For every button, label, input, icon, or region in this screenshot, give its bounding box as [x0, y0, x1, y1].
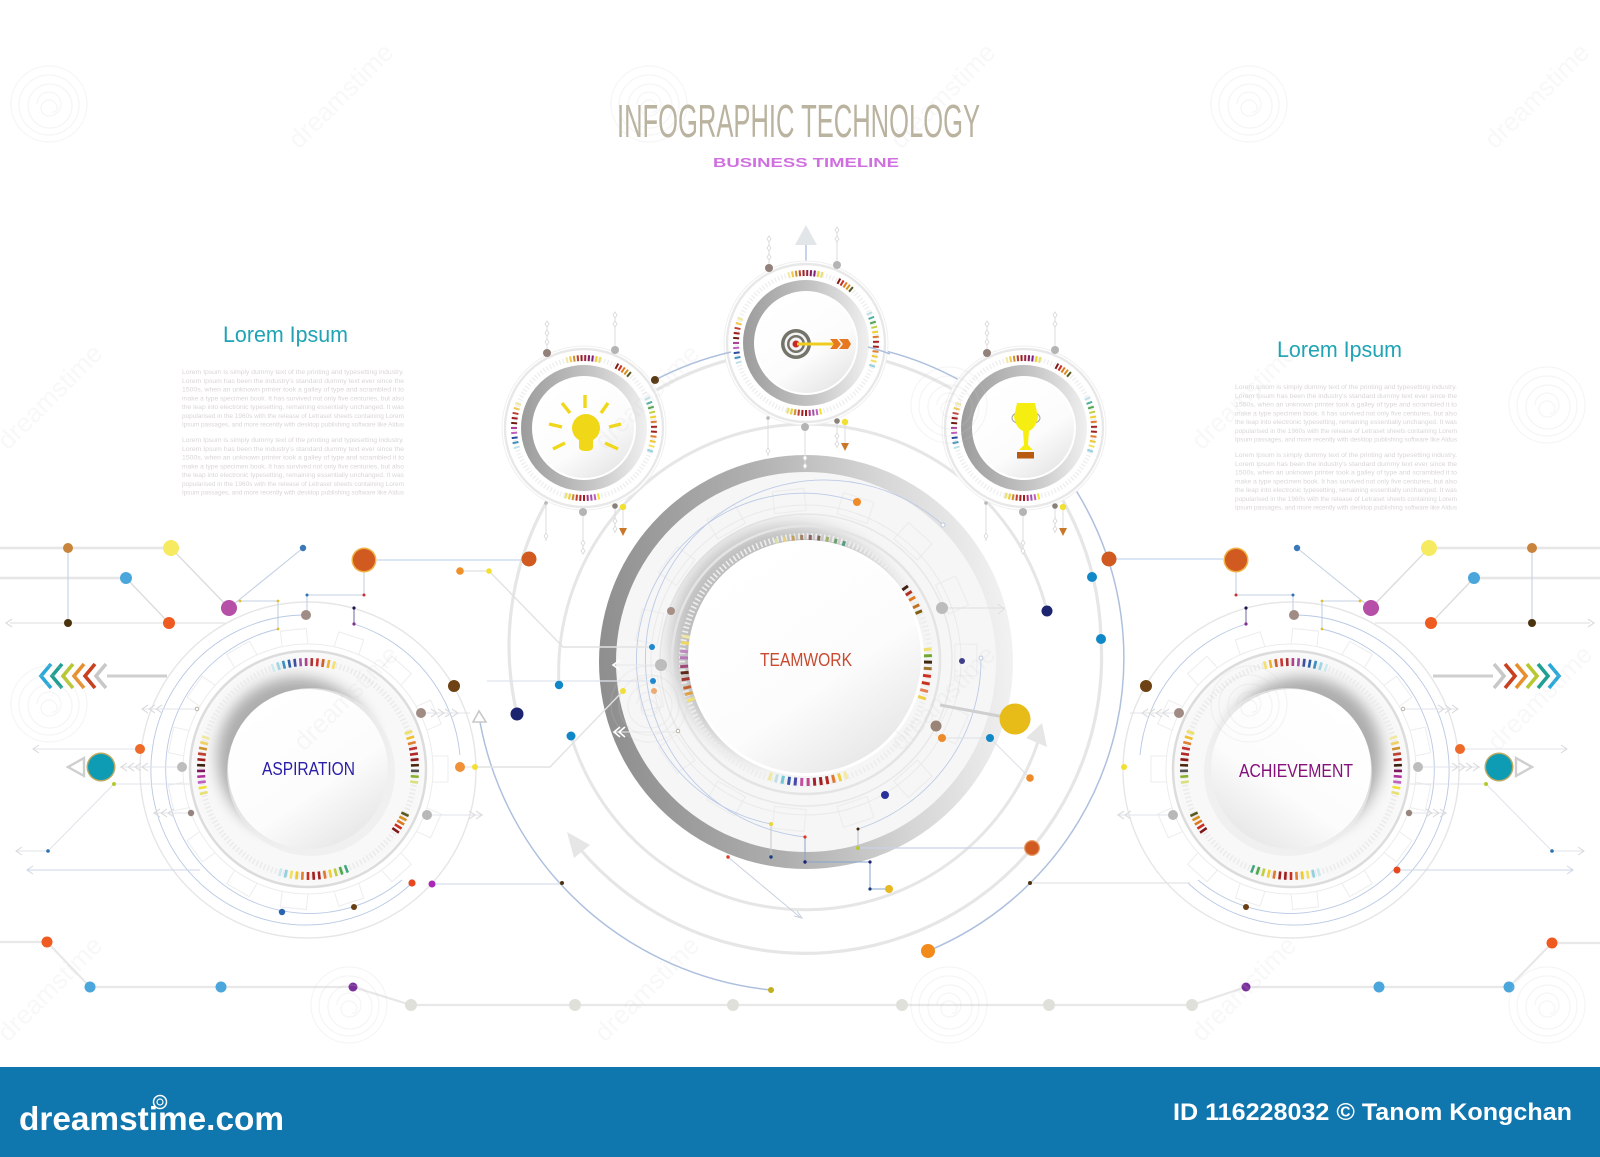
- text block: left paragraphs: make a type specimen book. It has survived not only five centuries, but also: [182, 464, 404, 470]
- watermark: dreamstime: [884, 37, 1001, 154]
- text block: right paragraphs: Ipsum passages, and more recently with desktop publishing software like Aldus: [1235, 436, 1457, 444]
- watermark: dreamstime: [282, 37, 399, 154]
- text block: left paragraphs: Lorem Ipsum is simply dummy text of the printing and typesetting industry.: [182, 437, 404, 444]
- text block: right paragraphs: [1235, 384, 1457, 512]
- arrowhead: hollow blue arc start: [473, 711, 486, 722]
- watermark: dreamstime: [588, 930, 705, 1047]
- footer credit: ID 116228032 © Tanom Kongchan: [1173, 1099, 1572, 1126]
- footer logo: dreamstime.com: [19, 1100, 284, 1137]
- footer bar: [0, 1067, 1600, 1157]
- central connectors: [27, 559, 1573, 918]
- blue arcs behind the small circles: [480, 347, 1124, 990]
- icon: lightbulb: [549, 395, 621, 451]
- text block: right paragraphs: make a type specimen book. It has survived not only five centuries, but also: [1235, 478, 1457, 486]
- central connector dots: [279, 376, 1400, 993]
- text block: left paragraphs: popularised in the 1960s with the release of Letraset sheets containing Lorem: [182, 481, 404, 488]
- label: teamwork: TEAMWORK: [760, 650, 852, 670]
- icon: trophy: [1012, 403, 1040, 458]
- panel: aspiration circle: [140, 602, 476, 938]
- watermark: dreamstime: [1185, 930, 1302, 1047]
- text block: left paragraphs: 1500s, when an unknown printer took a galley of type and scrambled it to: [182, 454, 404, 462]
- text block: right paragraphs: popularised in the 1960s with the release of Letraset sheets containing Lorem: [1235, 428, 1457, 435]
- heading: left lorem ipsum: Lorem Ipsum: [223, 322, 348, 347]
- text block: left paragraphs: 1500s, when an unknown printer took a galley of type and scrambled it to: [182, 386, 404, 394]
- blue arc pieces on top of the small circles: [655, 347, 890, 380]
- text block: left paragraphs: the leap into electronic typesetting, remaining essentially unchanged. It was: [182, 404, 404, 411]
- arrowhead: lower right: [1026, 723, 1047, 747]
- arrowhead: up top: [795, 225, 817, 285]
- circuit network: right: [1117, 540, 1600, 925]
- text block: right paragraphs: 1500s, when an unknown printer took a galley of type and scrambled it to: [1235, 402, 1457, 408]
- watermark: dreamstime: [588, 338, 705, 455]
- text block: right paragraphs: Lorem Ipsum has been the industry's standard dummy text ever since the: [1235, 393, 1457, 400]
- text block: left paragraphs: Ipsum passages, and more recently with desktop publishing software like Aldus: [182, 490, 404, 496]
- watermark: dreamstime: [1185, 338, 1302, 455]
- watermark: dreamstime: [1481, 639, 1598, 756]
- concentric arcs around teamwork: [509, 350, 1102, 953]
- text block: right paragraphs: 1500s, when an unknown printer took a galley of type and scrambled it to: [1235, 470, 1457, 476]
- text block: right paragraphs: Lorem Ipsum is simply dummy text of the printing and typesetting industry.: [1235, 384, 1457, 391]
- teamwork inner circuit arcs: [636, 480, 981, 837]
- panel: target circle with dartboard: [724, 227, 888, 469]
- tick marks: teamwork: [680, 535, 932, 786]
- bottom timeline: [0, 936, 1600, 1011]
- text block: left paragraphs: make a type specimen book. It has survived not only five centuries, but also: [182, 396, 404, 402]
- arrowhead: lower left: [567, 832, 590, 858]
- icon: dartboard and arrow: [781, 329, 851, 359]
- text block: left paragraphs: popularised in the 1960s with the release of Letraset sheets containing Lorem: [182, 413, 404, 420]
- text block: left paragraphs: Ipsum passages, and more recently with desktop publishing software like Aldus: [182, 422, 404, 428]
- label: aspiration: ASPIRATION: [262, 759, 355, 779]
- text block: right paragraphs: Lorem Ipsum is simply dummy text of the printing and typesetting industry.: [1235, 452, 1457, 459]
- text block: left paragraphs: the leap into electronic typesetting, remaining essentially unchanged. It was: [182, 472, 404, 479]
- panel: achievement circle: [1123, 602, 1459, 938]
- subtitle: BUSINESS TIMELINE: [713, 155, 899, 170]
- circuit network: left: [0, 540, 483, 925]
- text block: right paragraphs: the leap into electronic typesetting, remaining essentially unchanged. It was: [1235, 487, 1457, 494]
- heading: right lorem ipsum: Lorem Ipsum: [1277, 337, 1402, 362]
- panel: idea circle with lightbulb: [502, 312, 666, 554]
- text block: right paragraphs: popularised in the 1960s with the release of Letraset sheets containing Lorem: [1235, 496, 1457, 503]
- text block: left paragraphs: Lorem Ipsum has been the industry's standard dummy text ever since the: [182, 378, 404, 385]
- text block: left paragraphs: Lorem Ipsum has been the industry's standard dummy text ever since the: [182, 446, 404, 453]
- text block: right paragraphs: Ipsum passages, and more recently with desktop publishing software like Aldus: [1235, 504, 1457, 512]
- text block: left paragraphs: [182, 369, 404, 496]
- text block: left paragraphs: Lorem Ipsum is simply dummy text of the printing and typesetting industry.: [182, 369, 404, 376]
- text block: right paragraphs: make a type specimen book. It has survived not only five centuries, but also: [1235, 410, 1457, 418]
- title: INFOGRAPHIC TECHNOLOGY: [617, 95, 980, 147]
- text block: right paragraphs: the leap into electronic typesetting, remaining essentially unchanged. It was: [1235, 419, 1457, 426]
- panel: teamwork circle: [599, 455, 1013, 869]
- watermark: dreamstime: [1478, 37, 1595, 154]
- watermark: dreamstime: [287, 639, 404, 756]
- text block: right paragraphs: Lorem Ipsum has been the industry's standard dummy text ever since the: [1235, 461, 1457, 468]
- panel: trophy circle: [942, 312, 1106, 554]
- label: achievement: ACHIEVEMENT: [1239, 761, 1353, 781]
- watermark: dreamstime: [884, 639, 1001, 756]
